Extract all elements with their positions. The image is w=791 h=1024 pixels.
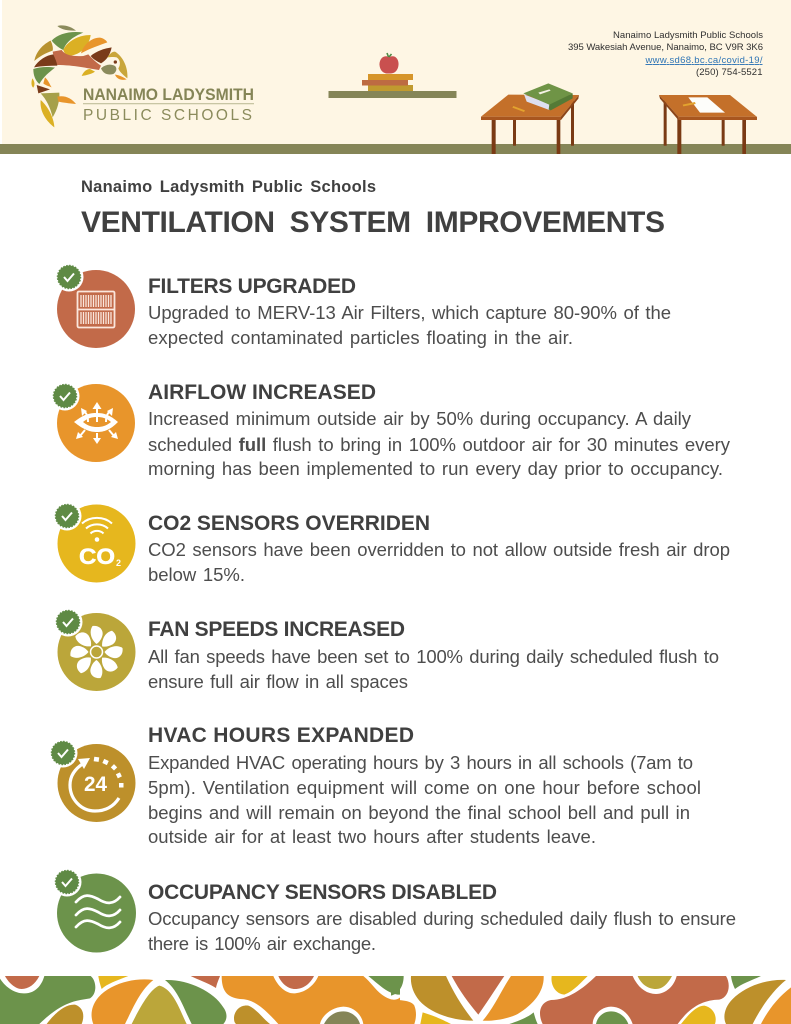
icon: airflow arrows [50, 382, 135, 462]
text block: CO2 sensors have been overridden to not allow outside fresh air drop [148, 539, 730, 560]
text block [148, 908, 736, 954]
icon: 24 hour clock [48, 738, 136, 822]
icon: fan [54, 608, 136, 691]
text block [148, 752, 701, 847]
heading: FILTERS UPGRADED [148, 275, 356, 298]
text block: 5pm). Ventilation equipment will come on one hour before school [148, 777, 701, 798]
text block [148, 408, 731, 479]
text block: outside air for at least two hours after students leave. [148, 826, 596, 847]
text block: scheduled full flush to bring in 100% outdoor air for 30 minutes every [148, 434, 731, 455]
panel: fan speeds increased [54, 608, 719, 692]
text block: there is 100% air exchange. [148, 933, 376, 954]
text block: expected contaminated particles floating in the air. [148, 327, 573, 348]
heading: HVAC HOURS EXPANDED [148, 724, 414, 747]
illustration: desk with paper [659, 95, 757, 154]
icon: air filter [54, 262, 135, 348]
footer mosaic pattern [0, 976, 791, 1024]
panel: CO2 sensors overriden [52, 502, 730, 585]
heading: AIRFLOW INCREASED [148, 381, 376, 404]
heading: FAN SPEEDS INCREASED [148, 618, 405, 641]
text block: Occupancy sensors are disabled during scheduled daily flush to ensure [148, 908, 736, 929]
logo wordmark bottom: PUBLIC SCHOOLS [83, 107, 252, 124]
text block: Increased minimum outside air by 50% during occupancy. A daily [148, 408, 692, 429]
heading: CO2 SENSORS OVERRIDEN [148, 512, 430, 535]
contact details: 395 Wakesiah Avenue, Nanaimo, BC V9R 3K6 [568, 42, 763, 53]
title: VENTILATION SYSTEM IMPROVEMENTS [81, 206, 665, 239]
illustration: shelf with books and apple [328, 53, 456, 98]
panel: filters upgraded [54, 262, 671, 348]
icon: 24 hour clock: 24 [84, 773, 107, 796]
panel: airflow increased [50, 381, 731, 479]
contact details: www.sd68.bc.ca/covid-19/ [644, 55, 763, 66]
text block: morning has been implemented to run every day prior to occupancy. [148, 458, 723, 479]
contact details: Nanaimo Ladysmith Public Schools [613, 30, 763, 41]
heading: OCCUPANCY SENSORS DISABLED [148, 881, 497, 904]
header banner [0, 0, 791, 154]
text block [148, 539, 730, 585]
panel: occupancy sensors disabled [52, 868, 736, 954]
icon: mosaic salmon [31, 25, 127, 127]
text block: Expanded HVAC operating hours by 3 hours in all schools (7am to [148, 752, 693, 773]
contact details: (250) 754-5521 [696, 67, 762, 78]
logo: Nanaimo Ladysmith Public Schools [31, 25, 254, 127]
text block: All fan speeds have been set to 100% during daily scheduled flush to [148, 646, 719, 667]
icon: CO2 sensor [52, 502, 136, 582]
icon: CO2 sensor: CO [79, 544, 115, 569]
subtitle: Nanaimo Ladysmith Public Schools [81, 178, 376, 196]
logo wordmark top: NANAIMO LADYSMITH [83, 86, 254, 104]
text block: below 15%. [148, 564, 245, 585]
text block [148, 302, 671, 348]
text block: begins and will remain on beyond the final school bell and pull in [148, 802, 690, 823]
contact details [568, 30, 763, 78]
panel: HVAC hours expanded [48, 724, 701, 847]
icon: CO2 sensor: 2 [116, 558, 121, 568]
illustration: desk with green book [481, 83, 579, 154]
text block [148, 646, 719, 692]
text block: ensure full air flow in all spaces [148, 671, 408, 692]
icon: air waves [52, 868, 136, 952]
text block: Upgraded to MERV-13 Air Filters, which capture 80-90% of the [148, 302, 671, 323]
